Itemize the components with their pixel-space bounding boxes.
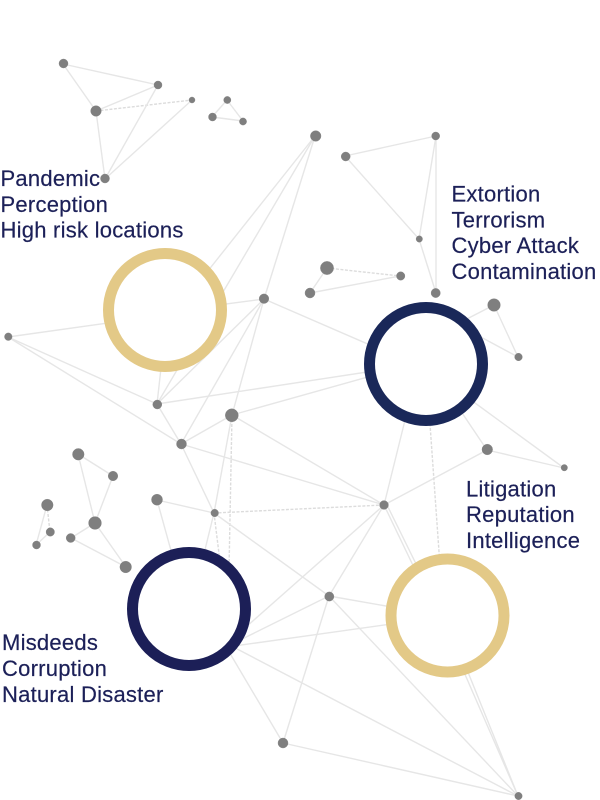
text: pandemic risks: Pandemic [0,166,100,191]
text: litigation risks: Litigation [466,476,556,502]
text: pandemic risks: High risk locations [0,218,184,242]
text: pandemic risks: Perception [0,192,108,217]
ring: gold bottom right [391,559,504,672]
text: pandemic risks [0,166,184,242]
text: litigation risks: Intelligence [466,528,580,553]
ring: navy bottom left [132,552,246,666]
text: extortion risks: Terrorism [452,208,545,232]
text: extortion risks: Extortion [452,182,540,206]
text: extortion risks: Contamination [452,259,596,284]
text: litigation risks [466,476,580,553]
text: misdeeds risks: Natural Disaster [2,682,164,707]
text: misdeeds risks: Corruption [2,656,107,681]
ring: navy top right [370,308,482,420]
text: extortion risks [452,182,596,284]
ring: gold top left [108,254,222,366]
text: extortion risks: Cyber Attack [452,233,580,258]
text: misdeeds risks: Misdeeds [2,630,98,655]
text: litigation risks: Reputation [466,502,575,527]
text: misdeeds risks [2,630,164,707]
